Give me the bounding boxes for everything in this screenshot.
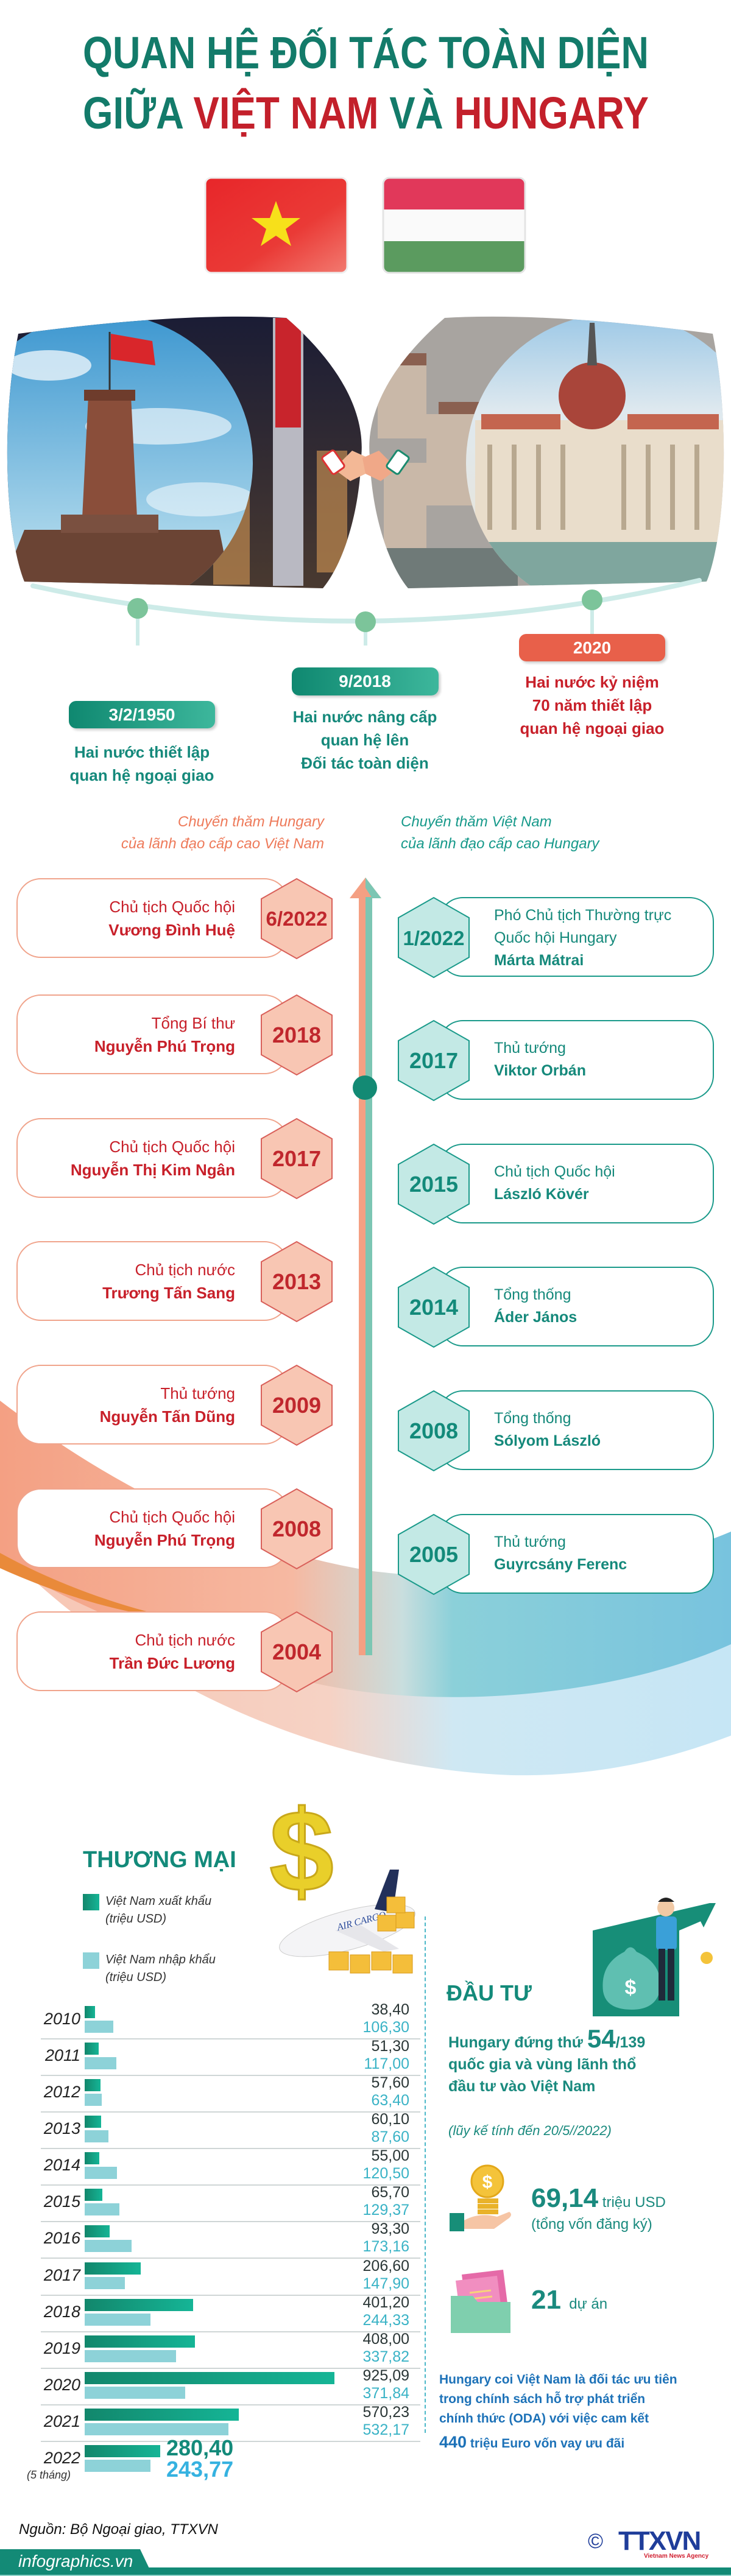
title: QUAN HỆ ĐỐI TÁC TOÀN DIỆN <box>83 27 649 78</box>
card: 6/2022 Vương Đình Huệ: Vương Đình Huệ <box>108 921 235 939</box>
bar chart: trade: 51,30 <box>371 2038 409 2055</box>
card: 1/2022 Márta Mátrai: Márta Mátrai <box>494 952 584 969</box>
bar chart: trade: 337,82 <box>363 2348 409 2365</box>
stat: projects: 21 dự án <box>531 2285 607 2315</box>
text: ODA <box>439 2373 677 2451</box>
text: ODA: Hungary coi Việt Nam là đối tác ưu tiên <box>439 2373 677 2387</box>
text: investment ranking: Hungary đứng thứ 54/139 <box>448 2024 645 2053</box>
bar chart: trade: 65,70 <box>371 2184 409 2201</box>
icon: investor with money bag: $ <box>625 1976 637 1999</box>
milestone: 2020 <box>519 634 668 737</box>
bar chart: trade: 106,30 <box>363 2019 409 2036</box>
milestone: 9/2018: Hai nước nâng cấp <box>293 708 437 726</box>
bar chart: trade: 408,00 <box>363 2331 409 2348</box>
card: 2017 Nguyễn Thị Kim Ngân: 2017 <box>272 1146 321 1171</box>
bar chart: trade: 117,00 <box>364 2055 409 2072</box>
card: 2017 Nguyễn Thị Kim Ngân: Nguyễn Thị Kim Ngân <box>71 1161 235 1179</box>
bar chart: trade: (5 tháng) <box>27 2469 71 2481</box>
bar chart: trade: 2011 <box>45 2046 80 2064</box>
card: 2013 Trương Tấn Sang: Chủ tịch nước <box>135 1261 235 1279</box>
heading: Hungary visits <box>401 814 600 852</box>
bar chart: trade: 38,40 <box>371 2001 409 2018</box>
timeline: milestones <box>30 578 702 646</box>
bar chart: trade: 532,17 <box>363 2421 409 2438</box>
card: 2008 Sólyom László <box>398 1390 714 1471</box>
text: investment ranking <box>448 2024 645 2095</box>
bar chart: trade: 63,40 <box>371 2092 409 2109</box>
bar chart: trade: 2013 <box>44 2119 80 2138</box>
card: 2014 Áder János: Áder János <box>494 1309 577 1326</box>
card: 2008 Sólyom László: 2008 <box>409 1418 458 1443</box>
card: 2005 Guyrcsány Ferenc <box>398 1514 714 1595</box>
bar chart: trade: 206,60 <box>363 2258 409 2275</box>
bar chart: trade: 87,60 <box>371 2128 409 2145</box>
card: 2008 Nguyễn Phú Trọng: Nguyễn Phú Trọng <box>94 1531 235 1549</box>
icon: coin in hand: $ <box>482 2172 493 2192</box>
card: 2008 Sólyom László: Sólyom László <box>494 1432 601 1449</box>
card: 2015 László Kövér <box>398 1144 714 1225</box>
card: 2015 László Kövér: Chủ tịch Quốc hội <box>494 1163 615 1180</box>
card: 2008 Sólyom László: Tổng thống <box>494 1410 571 1427</box>
card: 2018 Nguyễn Phú Trọng: 2018 <box>272 1022 321 1047</box>
milestone: 2020: Hai nước kỷ niệm <box>525 673 659 691</box>
bar chart: trade: 2016 <box>44 2229 80 2247</box>
heading: Hungary visits: của lãnh đạo cấp cao Hungary <box>401 836 599 852</box>
bar chart: trade: 173,16 <box>363 2238 409 2255</box>
card: 2018 Nguyễn Phú Trọng <box>16 994 333 1075</box>
card: 2009 Nguyễn Tấn Dũng: Nguyễn Tấn Dũng <box>100 1407 235 1426</box>
card: 1/2022 Márta Mátrai: 1/2022 <box>403 927 464 949</box>
heading: Vietnam visits <box>121 814 325 852</box>
milestone: 3/2/1950: 3/2/1950 <box>108 705 175 724</box>
card: 2005 Guyrcsány Ferenc: Thủ tướng <box>494 1533 566 1550</box>
card: 2014 Áder János <box>398 1267 714 1348</box>
logo: TTXVN <box>588 2526 709 2560</box>
card: 2004 Trần Đức Lương <box>16 1611 333 1692</box>
card: 1/2022 Márta Mátrai: Phó Chủ tịch Thường trực <box>494 907 671 924</box>
text: ODA: 440 triệu Euro vốn vay ưu đãi <box>439 2433 624 2451</box>
heading: investment: ĐẦU TƯ <box>447 1980 532 2005</box>
card: 2008 Nguyễn Phú Trọng: 2008 <box>272 1516 321 1541</box>
card: 2015 László Kövér: László Kövér <box>494 1186 589 1203</box>
card: 1/2022 Márta Mátrai <box>398 896 714 978</box>
heading: Vietnam visits: Chuyến thăm Hungary <box>178 814 324 830</box>
bar chart: trade: 371,84 <box>363 2385 409 2402</box>
milestone: 3/2/1950: quan hệ ngoại giao <box>70 766 214 784</box>
bar chart: trade: 243,77 <box>166 2457 233 2482</box>
bar chart: trade: 2021 <box>44 2412 80 2430</box>
card: 2017 Viktor Orbán: Viktor Orbán <box>494 1062 586 1079</box>
card: 2017 Viktor Orbán: Thủ tướng <box>494 1040 566 1057</box>
milestone: 2020: 70 năm thiết lập <box>532 696 652 714</box>
stat: total capital <box>531 2183 666 2233</box>
stat: total capital: 69,14 triệu USD <box>531 2183 666 2213</box>
card: 6/2022 Vương Đình Huệ: 6/2022 <box>266 907 327 930</box>
card: 2013 Trương Tấn Sang: 2013 <box>272 1269 321 1294</box>
footer: infographics.vn <box>18 2552 133 2571</box>
legend: trade: Việt Nam xuất khẩu <box>105 1895 211 1908</box>
card: 2017 Nguyễn Thị Kim Ngân <box>16 1118 333 1200</box>
logo: TTXVN: Vietnam News Agency <box>644 2553 708 2560</box>
bar chart: trade: 401,20 <box>363 2294 409 2311</box>
card: 1/2022 Márta Mátrai: Quốc hội Hungary <box>494 929 617 946</box>
card: 2014 Áder János: Tổng thống <box>494 1286 571 1303</box>
legend: trade <box>83 1894 216 1984</box>
text: source: Nguồn: Bộ Ngoại giao, TTXVN <box>19 2521 218 2538</box>
background waves <box>0 1401 731 1776</box>
bar chart: trade: 2014 <box>44 2156 80 2174</box>
bar chart: trade: 2020 <box>44 2376 80 2394</box>
bar chart: trade: 55,00 <box>371 2147 409 2164</box>
heading: Hungary visits: Chuyến thăm Việt Nam <box>401 814 552 830</box>
card: 2008 Nguyễn Phú Trọng <box>18 1488 333 1569</box>
bar chart: trade: 129,37 <box>363 2201 409 2219</box>
title <box>83 27 649 138</box>
card: 6/2022 Vương Đình Huệ <box>16 878 333 960</box>
bar chart: trade: 2010 <box>44 2010 80 2028</box>
bar chart: trade: 925,09 <box>363 2367 409 2384</box>
card: 2004 Trần Đức Lương: 2004 <box>272 1639 321 1664</box>
card: 2004 Trần Đức Lương: Trần Đức Lương <box>110 1654 235 1672</box>
icon: coin in hand <box>450 2164 511 2231</box>
card: 2018 Nguyễn Phú Trọng: Nguyễn Phú Trọng <box>94 1037 235 1055</box>
icon: investor with money bag <box>593 1898 716 2016</box>
milestone: 9/2018: quan hệ lên <box>321 731 409 749</box>
heading: Vietnam visits: của lãnh đạo cấp cao Việt Nam <box>121 836 324 852</box>
icon: folder <box>451 2270 510 2333</box>
card: 2015 László Kövér: 2015 <box>409 1172 458 1197</box>
icon: dollar and air cargo plane <box>269 1800 415 1973</box>
arrow: central timeline <box>350 878 381 1655</box>
logo: TTXVN: TTXVN <box>618 2526 700 2556</box>
bar chart: trade: 57,60 <box>371 2074 409 2091</box>
text: ODA: chính thức (ODA) với việc cam kết <box>439 2412 649 2426</box>
card: 2017 Viktor Orbán: 2017 <box>409 1048 458 1073</box>
divider: dashed <box>425 1916 426 2433</box>
card: 2017 Nguyễn Thị Kim Ngân: Chủ tịch Quốc hội <box>109 1138 235 1156</box>
milestone: 9/2018: Đối tác toàn diện <box>301 754 429 772</box>
card: 2009 Nguyễn Tấn Dũng: 2009 <box>272 1393 321 1418</box>
legend: trade: (triệu USD) <box>105 1912 166 1926</box>
flag: Vietnam <box>205 177 348 274</box>
heading: trade: THƯƠNG MẠI <box>83 1847 236 1873</box>
card: 2005 Guyrcsány Ferenc: 2005 <box>409 1542 458 1567</box>
card: 2013 Trương Tấn Sang <box>16 1241 333 1323</box>
bar chart: trade: 570,23 <box>363 2404 409 2421</box>
milestone: 9/2018: 9/2018 <box>339 672 391 691</box>
card: 2008 Nguyễn Phú Trọng: Chủ tịch Quốc hội <box>109 1508 235 1526</box>
bar chart: trade: 2015 <box>44 2192 80 2211</box>
milestone: 3/2/1950: Hai nước thiết lập <box>74 743 210 761</box>
card: 2018 Nguyễn Phú Trọng: Tổng Bí thư <box>152 1014 235 1032</box>
icon: handshake <box>321 449 410 481</box>
bar chart: trade <box>27 2001 420 2482</box>
text: investment ranking: quốc gia và vùng lãnh thổ <box>448 2056 636 2073</box>
flag: Hungary <box>383 177 526 274</box>
card: 2005 Guyrcsány Ferenc: Guyrcsány Ferenc <box>494 1556 627 1573</box>
bar chart: trade: 2019 <box>44 2339 80 2357</box>
card: 2009 Nguyễn Tấn Dũng <box>16 1364 333 1446</box>
bar chart: trade: 60,10 <box>371 2111 409 2128</box>
card: 2017 Viktor Orbán <box>398 1019 714 1101</box>
icon: dollar and air cargo plane: AIR CARGO <box>336 1910 387 1933</box>
photo collage <box>7 317 724 588</box>
card: 6/2022 Vương Đình Huệ: Chủ tịch Quốc hội <box>109 898 235 916</box>
text: cumulative note: (lũy kế tính đến 20/5//2022) <box>448 2123 612 2138</box>
milestone: 9/2018 <box>292 667 442 772</box>
text: ODA: trong chính sách hỗ trợ phát triển <box>439 2392 645 2406</box>
legend: trade: Việt Nam nhập khẩu <box>105 1953 216 1966</box>
card: 2004 Trần Đức Lương: Chủ tịch nước <box>135 1631 235 1649</box>
milestone: 2020: quan hệ ngoại giao <box>520 719 664 737</box>
milestone: 2020: 2020 <box>573 638 611 657</box>
title: GIỮA VIỆT NAM VÀ HUNGARY <box>83 88 649 138</box>
bar chart: trade: 2017 <box>44 2266 80 2284</box>
bar chart: trade: 244,33 <box>363 2312 409 2329</box>
bar chart: trade: 2012 <box>44 2083 80 2101</box>
legend: trade: (triệu USD) <box>105 1971 166 1984</box>
stat: total capital: (tổng vốn đăng ký) <box>531 2216 652 2233</box>
card: 2009 Nguyễn Tấn Dũng: Thủ tướng <box>160 1384 235 1402</box>
card: 2013 Trương Tấn Sang: Trương Tấn Sang <box>102 1284 235 1302</box>
bar chart: trade: 2018 <box>44 2303 80 2321</box>
bar chart: trade: 280,40 <box>166 2435 233 2460</box>
bar chart: trade: 147,90 <box>363 2275 409 2292</box>
card: 2014 Áder János: 2014 <box>409 1295 458 1320</box>
bar chart: trade: 93,30 <box>371 2220 409 2237</box>
bar chart: trade: 2022 <box>44 2449 80 2467</box>
milestone: 3/2/1950 <box>69 701 218 784</box>
bar chart: trade: 120,50 <box>363 2165 409 2182</box>
logo: TTXVN: © <box>588 2530 603 2553</box>
footer <box>0 2549 731 2576</box>
text: investment ranking: đầu tư vào Việt Nam <box>448 2078 595 2095</box>
